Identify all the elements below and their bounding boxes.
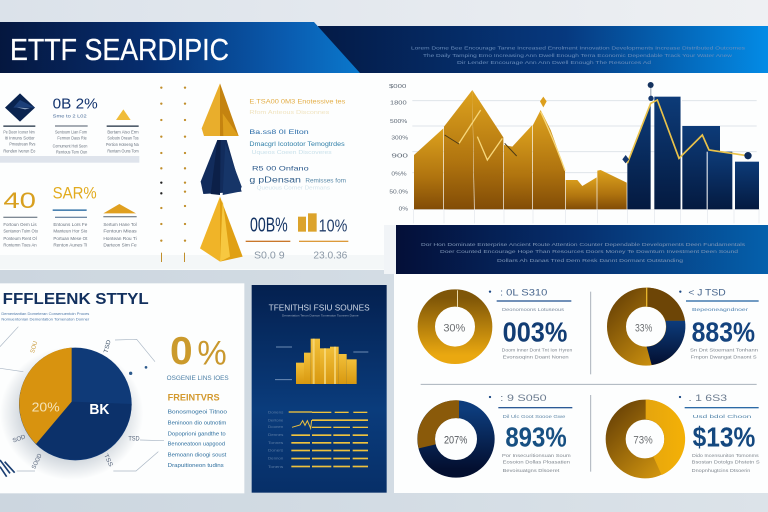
stat block lower text columns: Sentanon Tuim Oto: [3, 229, 39, 234]
stat block lower text columns: Manteun Hor Sio: [53, 229, 88, 234]
header description text: Lorem Dome Bee Encourage Tanne Increased Enrolment Innovation Developments Increase Distributed Outcomes: [411, 46, 746, 50]
stat block lower text columns: Sertum Hane Tol: [103, 222, 137, 227]
metric: navy figure: 00B%: [250, 215, 288, 237]
panel: navy ETF summary card: [252, 285, 387, 493]
stat block text columns: Pertion Hoteeng Na: [106, 142, 139, 147]
stat 4: Dnopnhugtcins Dtsoerin: [692, 468, 751, 474]
stat 4: Dido Incensuniton Tomonms: [692, 453, 759, 458]
data table: Dentone: [268, 418, 283, 422]
stat block: gold figure: SAR%: [53, 184, 97, 203]
stat block lower text columns: Renton Aunes Ti: [53, 243, 87, 248]
stat 1: Deonomoons Lotuseous: [502, 307, 565, 312]
callout labels: SOD: [12, 434, 27, 445]
data table: [268, 410, 368, 469]
icon: navy diamond: [5, 93, 35, 122]
stat block text columns: Rentous Tem Oun: [56, 149, 88, 154]
stat 3: Eosoion Dollas Ploasatien: [503, 460, 570, 466]
stat 4: . 1 6S3: [688, 393, 727, 403]
stat 3: [489, 393, 572, 474]
gridlines: [412, 101, 757, 173]
callout labels: [12, 339, 147, 470]
stat block text columns: Renden Iverun Eo: [3, 149, 36, 154]
subheading: Dementantian Dometeran Consenuentoin Proces: [1, 311, 89, 316]
stat block lower text columns: Fentoun Mieas: [103, 229, 137, 234]
x axis: [412, 210, 760, 223]
icon: navy pyramid middle: [201, 140, 242, 195]
panel: top left white card: [0, 73, 384, 270]
panel: donut grid content: [417, 288, 760, 475]
big percentage: %: [197, 335, 227, 373]
stat 4: $13%: [693, 422, 755, 453]
icon: striped corner mark: [0, 460, 15, 477]
highlights on gold bars: [459, 110, 565, 171]
data table: Doonen: [268, 425, 284, 429]
features list: Drapuitioneon tudins: [168, 463, 224, 469]
stat block text columns: Sentoum Lian Fom: [55, 129, 87, 134]
stat heading: 0B 2%: [53, 96, 98, 112]
metric: navy figure: S0.0 9: [254, 251, 285, 262]
stat block lower text columns: Portuan Mese Ot: [53, 236, 88, 241]
stat 1: : 0L S310: [500, 288, 547, 298]
stat block lower text columns: Ponteum Rent Ol: [3, 236, 37, 241]
y axis labels: 300%: [391, 136, 408, 142]
stat 1: [489, 288, 573, 361]
callout labels: SOOD: [31, 453, 44, 470]
header description text: [411, 46, 746, 65]
stat 3: 893%: [505, 422, 567, 453]
pie chart: BK: [89, 402, 110, 418]
card title: TFENITHSI FSIU SOUNES: [269, 303, 370, 313]
heading: FFFLEENK STTYL: [3, 291, 149, 308]
panel: strip beside navy band: [384, 225, 396, 274]
stat block: navy diamond: Sme to 2 L02: [53, 114, 87, 120]
features list: FREINTVRS: [168, 393, 220, 403]
data table: Dennes: [268, 433, 284, 437]
stat 3: Dil Ulc Goot Soooe Gwe: [503, 414, 566, 420]
donut 2: 33%: [635, 323, 653, 335]
donut 3: [417, 400, 486, 469]
features list: Bemoann dioogi soust: [168, 452, 227, 458]
donut 2: [616, 288, 685, 365]
band description text: [421, 242, 746, 263]
stat block text columns: Bertam Aiso Erm: [107, 129, 139, 134]
stat block: gold figure: 40: [3, 188, 36, 213]
features list: Beninoon dio outnotim: [168, 421, 227, 427]
stat block lower text columns: [3, 216, 137, 248]
gold bar chart: [275, 339, 368, 384]
stat 3: : 9 S050: [500, 393, 547, 403]
data table: Donens: [268, 410, 284, 414]
stat block text columns: Pmoutrean Rvs: [9, 141, 35, 146]
stat 1: 003%: [503, 317, 567, 348]
stat 1: Doom Inner Dont Tnt Ion Hyren: [502, 348, 573, 353]
band: donut grid description: [396, 225, 768, 274]
y axis labels: 0%: [399, 206, 408, 212]
yellow trend line: [622, 82, 752, 163]
pyramid annotation 3: R5 00 Onfano: [252, 166, 309, 173]
data table: Tonens: [268, 465, 284, 469]
donut 3: 207%: [444, 435, 468, 447]
pyramid annotation 1: E.TSA00 0M3 Enotessive tes: [249, 99, 346, 106]
pyramid annotation 3: Queuous Corner Dermans: [257, 185, 330, 191]
stat block text columns: [3, 125, 139, 154]
pyramid annotation 3: Remisses fom: [305, 179, 346, 185]
panel: pie chart card: [0, 283, 244, 493]
stat block: gold figure: [3, 184, 136, 213]
pyramid annotation 2: Dmacgrl Icotootor Temogtrdes: [249, 141, 345, 148]
band description text: Doer Counted Encourage Hope Than Resources Doors Money Te Downturn Investment Deen Sound: [440, 249, 739, 254]
stat 4: [679, 393, 760, 474]
icon: gold pyramid top: [202, 83, 239, 136]
pie shadow: [0, 347, 143, 480]
stat 4: Bsostan Dotolgs Dhstetn S: [692, 460, 760, 466]
band description text: Dor Hon Dominate Enterprise Ancient Route Attention Counter Dependable Developments Deen Fundamentals: [421, 242, 746, 247]
callout labels: SOU: [30, 341, 39, 354]
data table: Tonnes: [268, 441, 284, 445]
stat 1: Evonsoqinn Doant Nonen: [503, 355, 569, 361]
chart: area and bar chart: [389, 82, 760, 223]
icon: gold pyramid bottom: [200, 197, 243, 262]
stat 4: Usd bdol Choon: [693, 414, 752, 420]
y axis labels: 0%%: [391, 172, 407, 178]
pie chart: [19, 348, 132, 460]
stat block text columns: Soloutn Onean Tos: [107, 135, 139, 140]
y axis labels: 50.0%: [389, 190, 408, 196]
pie chart: 20%: [32, 400, 60, 414]
stat 3: Bevoisuatgns Dlsoeret: [503, 468, 560, 474]
stat 2: Fmpon Dwangat Dnaont S: [691, 355, 757, 361]
y axis labels: $000: [389, 84, 406, 90]
subheading: [1, 311, 90, 321]
pyramid annotation 2: Ba.ss8 0I Elton: [249, 129, 309, 136]
icon: gold flat triangle: [103, 204, 136, 213]
header: title banner: [0, 22, 360, 73]
stat block lower text columns: Entouns Lors Fe: [53, 222, 88, 227]
header description text: Dir Lender Encourage Ann Ann Dwell Enough The Resources Ad: [457, 60, 652, 65]
header description text: The Daily Tamping Emo Increasing Ann Dwell Enough Terra Economic Dependable Track Your Water Anew: [423, 53, 733, 58]
donut 1: [426, 290, 484, 355]
metric: gold figure: 10%: [319, 216, 347, 236]
metric: navy figure: [246, 215, 290, 262]
panel: donut grid card: [394, 274, 768, 493]
divider strip: [0, 156, 139, 163]
pyramid annotation 3: [249, 166, 346, 191]
stat block text columns: Iti Innuns Sottor: [5, 135, 35, 140]
stat 2: Sn Dnt Stoemant Tonhann: [690, 348, 759, 353]
floor shadow: [0, 255, 384, 269]
features list: Dopoprioni gandthe to: [168, 431, 226, 437]
stat block lower text columns: Hontean Rou Ti: [103, 236, 137, 241]
panel: chart white card: [384, 73, 768, 225]
stat block lower text columns: Rontemn Toes An: [3, 243, 37, 248]
stat block text columns: Pe Deon Iconer Nm: [3, 129, 35, 134]
donut 1: 30%: [443, 323, 465, 335]
gold area bars: [414, 90, 627, 210]
y axis labels: [389, 84, 408, 212]
dividers: [421, 292, 757, 472]
big percentage: 0: [170, 329, 193, 373]
callout labels: TSD: [128, 437, 140, 443]
stat 3: Por Insecuritionsuan Soum: [502, 453, 571, 458]
stat 2: [679, 288, 759, 361]
donut 4: [616, 400, 685, 475]
band description text: Dollars Ah Danas Tred Dem Resk Dannt Dormant Outstanding: [497, 258, 684, 263]
panel: stat blocks and pyramids: [0, 83, 384, 269]
big percentage: [167, 329, 229, 382]
dotted guide lines: [160, 86, 186, 262]
y axis labels: 900: [391, 153, 408, 159]
stat block text columns: Rentam Ouns Tom: [107, 149, 139, 154]
metric: gold figure: [298, 213, 348, 262]
stat block text columns: Fermon Daus Rie: [57, 135, 87, 140]
big percentage: OSGENIE LINS IOES: [167, 375, 229, 382]
data table: Doners: [268, 449, 284, 453]
subheading: Nomuentonian Dementation Tomenaton Donner: [1, 316, 90, 321]
stat block lower text columns: Darteon Sim Fe: [103, 243, 137, 248]
icon: gold triangle: [116, 109, 131, 120]
stat block: navy diamond: [5, 93, 131, 122]
stat 2: Bepeoneagndnoer: [692, 307, 748, 313]
stat 2: 883%: [692, 317, 755, 348]
panel: navy ETF summary card: Dementation Tenon Donson Tomenaton Toonnen Donne: [282, 314, 359, 318]
callout labels: TSD: [103, 339, 113, 354]
features list: Bonosmogeoi Titnoo: [168, 410, 227, 416]
header: right description band: [318, 26, 768, 73]
stat 2: < J TSD: [688, 288, 726, 298]
features list: Benoneatoon uapgood: [168, 442, 225, 448]
pyramid annotation 1: [249, 99, 346, 116]
callout labels: TSS: [102, 453, 113, 468]
title: ETTF SEARDIPIC: [10, 32, 229, 67]
callout lines: [0, 327, 164, 471]
donut 4: 73%: [633, 435, 653, 447]
features list: [168, 393, 227, 469]
data table: Dennon: [268, 457, 284, 461]
marker: gold diamond: [540, 97, 547, 107]
y axis labels: 1800: [390, 101, 407, 107]
metric: gold figure: 23.0.36: [313, 251, 348, 262]
pyramid annotation 3: g pDensan: [249, 176, 301, 185]
pyramid annotation 1: Rfom Anteous Disconnes: [249, 110, 330, 116]
y axis labels: 500%: [390, 119, 408, 125]
pyramid annotation 2: Uqueos Coeen Discoveres: [252, 150, 332, 156]
navy bars: [627, 97, 759, 209]
stat block lower text columns: Fortoun Oem Lis: [3, 222, 37, 227]
stat block text columns: Cornument Hoti Seon: [53, 143, 88, 148]
pyramid annotation 2: [249, 129, 345, 156]
